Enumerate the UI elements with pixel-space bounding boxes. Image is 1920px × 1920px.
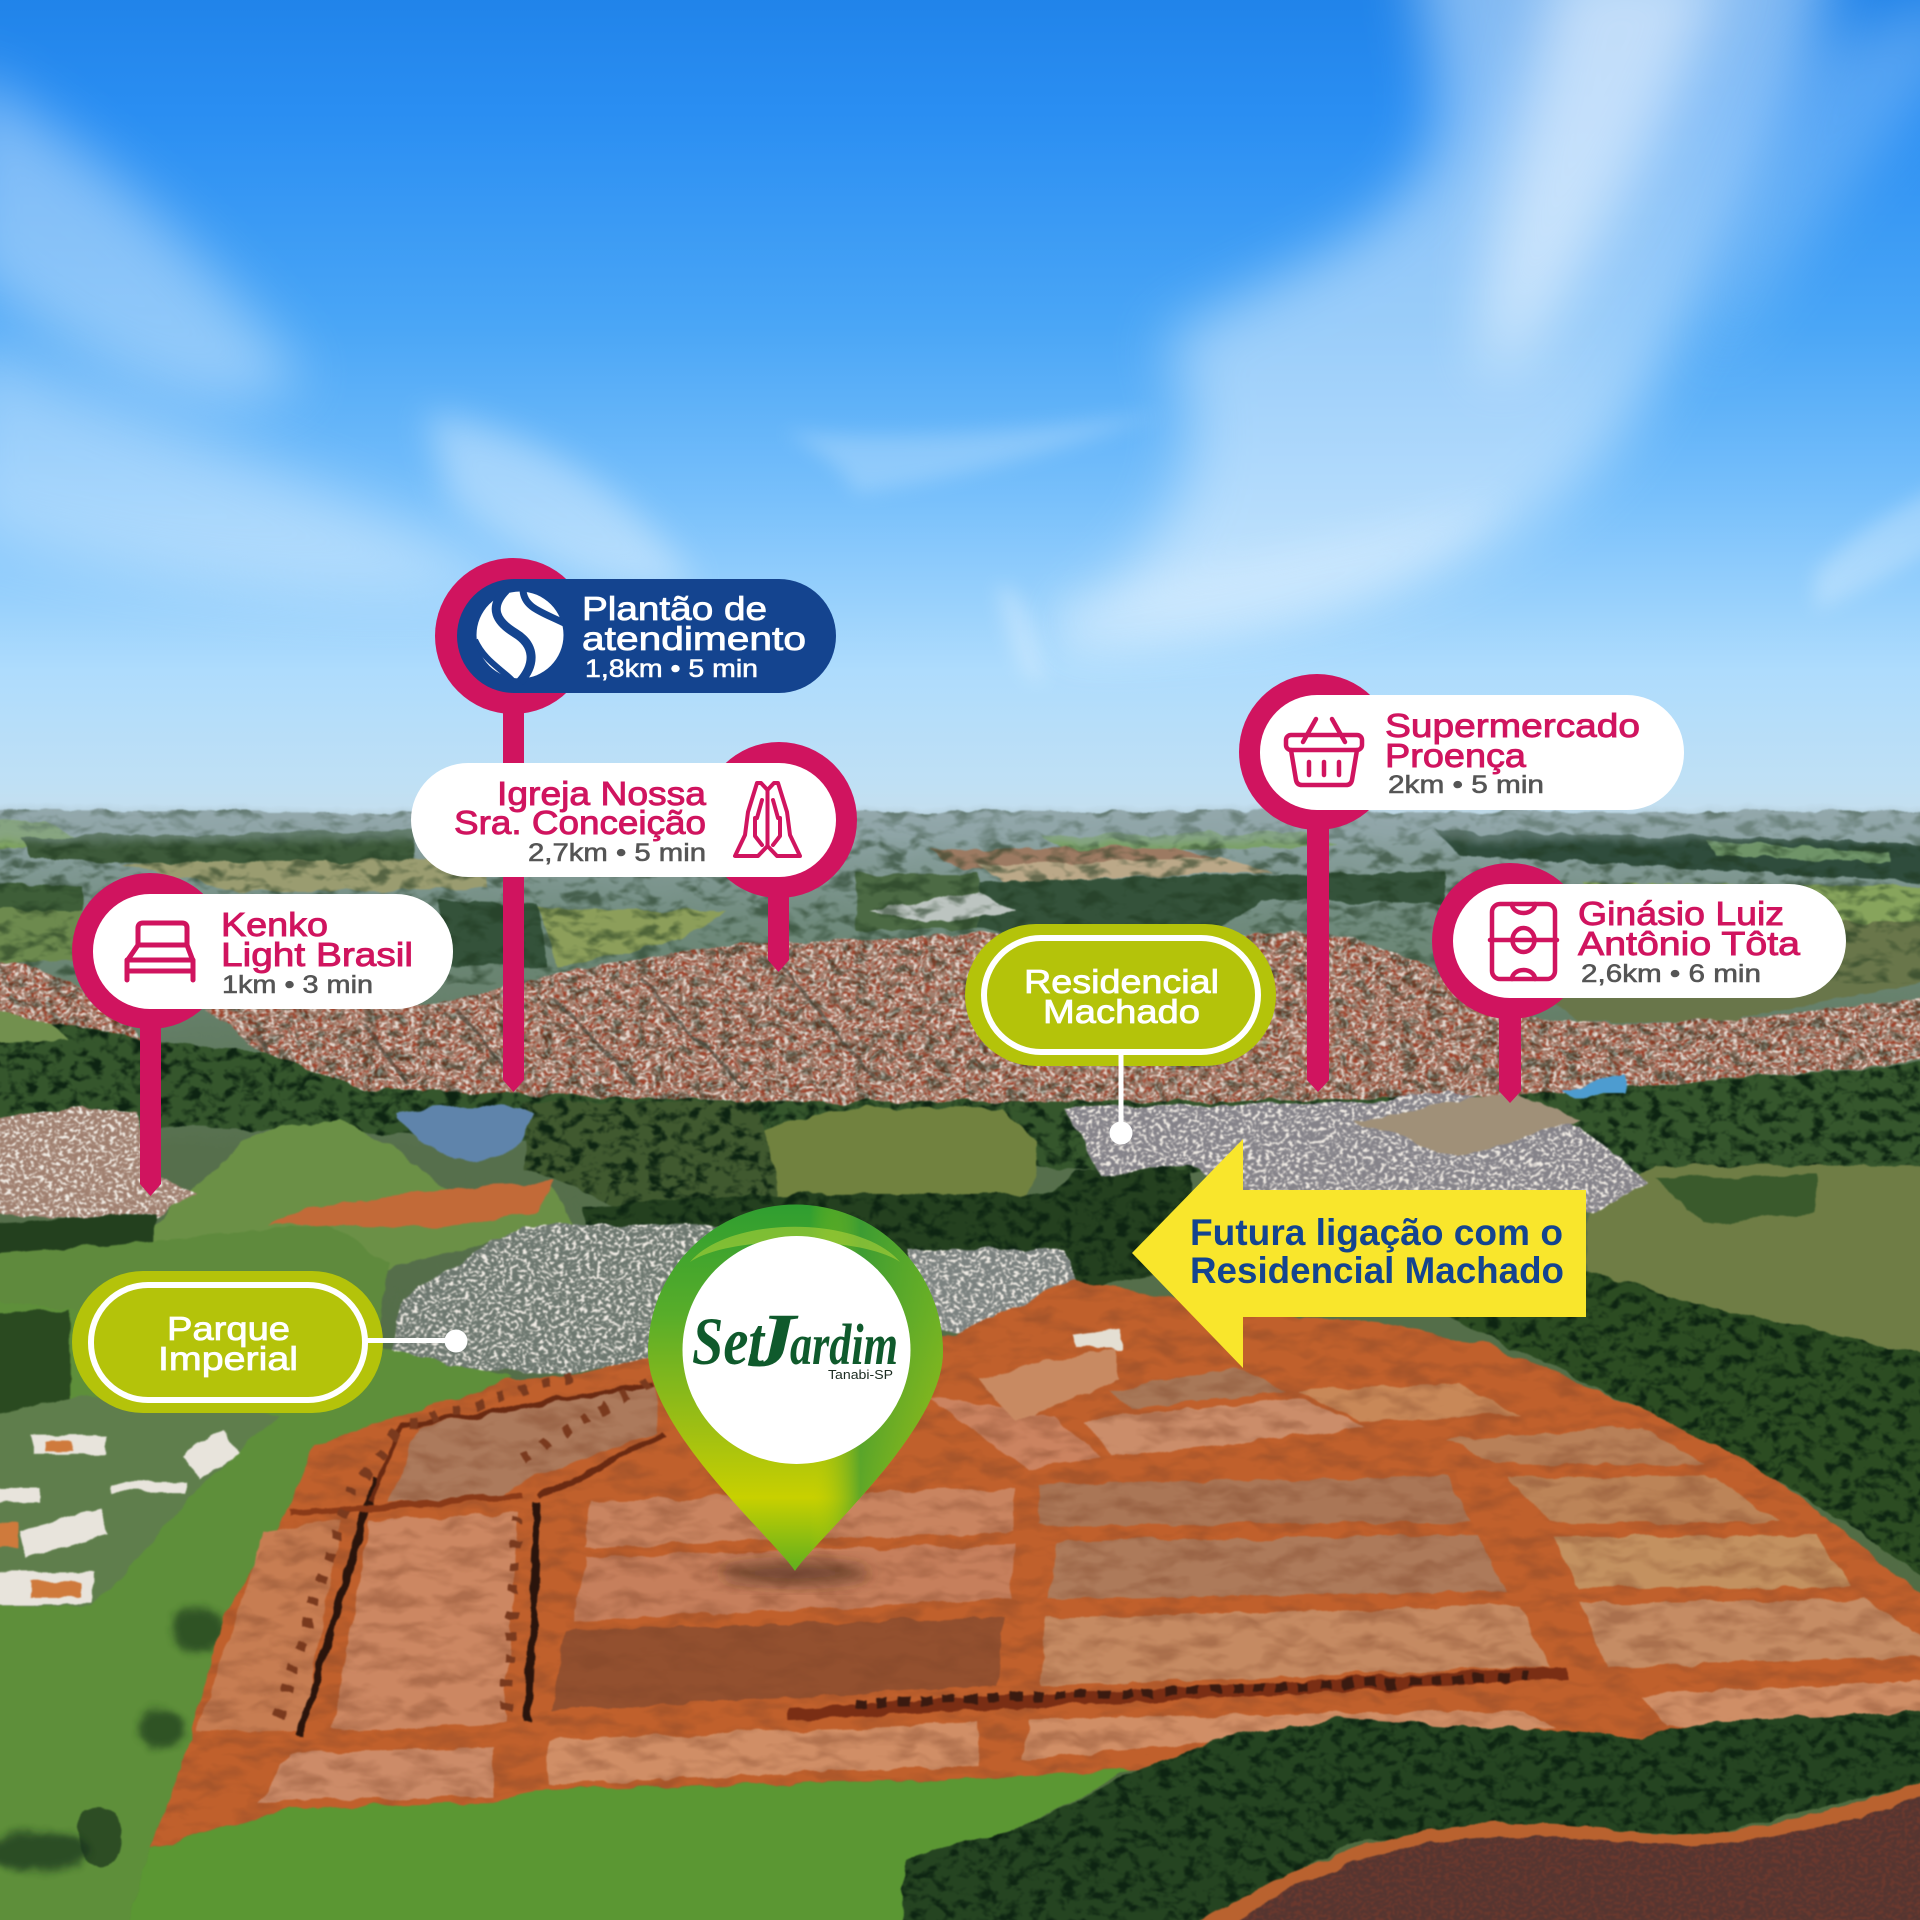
pin head and stem [72,873,228,1196]
pin: Ginásio Luiz Antônio Tôta [1432,863,1846,1103]
pin: Igreja Nossa Sra. Conceição [411,742,857,972]
label text: Ginásio Luiz [1578,895,1784,932]
label text: 2km • 5 min [1388,771,1544,799]
logo text: ardim [790,1312,898,1377]
connector and dot [367,1330,468,1352]
right forest [1384,1274,1920,1593]
construction site: red earth plots [149,1280,1920,1849]
yellow arrow shape [1132,1139,1586,1368]
white pill [1453,884,1846,998]
navy pill [457,579,836,693]
label text: Supermercado [1385,707,1640,744]
label text [158,1310,298,1377]
arrow text [1190,1212,1564,1291]
label text: Proença [1385,737,1527,774]
callout: Parque Imperial [72,1271,468,1413]
label text: 1km • 3 min [222,971,373,999]
label text: Light Brasil [221,936,413,973]
white disc [682,1236,910,1464]
icon: sports court [1490,904,1557,979]
pin head and stem [701,742,857,972]
label text: Parque [167,1310,290,1347]
pin head and stem [435,558,591,1092]
label text: Residencial [1024,963,1219,1000]
label text: Antônio Tôta [1578,925,1801,962]
pin head and stem [1239,674,1395,1092]
callout: Residencial Machado [965,924,1276,1144]
pin shadow [720,1562,870,1584]
town [0,932,1920,1102]
icon: bed [127,923,193,980]
main location pin: Set Jardim [648,1204,943,1584]
label text: Igreja Nossa [497,775,707,812]
green pill [72,1271,383,1413]
label text [454,775,707,867]
lower-left grass and houses [0,1298,1139,1920]
label text [1385,707,1640,799]
arrow text: Futura ligação com o [1190,1212,1563,1253]
label text: Imperial [158,1340,298,1377]
arrow text: Residencial Machado [1190,1250,1564,1291]
label text [1578,895,1801,988]
sky [0,0,1920,843]
midground fields, lake and hill [0,1102,1920,1360]
ploughed field [1175,1772,1920,1920]
foreground forest [905,1710,1920,1920]
white pill [411,763,836,877]
logo text: Set [692,1303,766,1379]
pin: Plantão de atendimento [435,558,836,1092]
pin: Supermercado Proença [1239,674,1684,1092]
label text [221,906,413,999]
label text: Kenko [221,906,328,943]
label text: 2,7km • 5 min [528,839,706,867]
label text: atendimento [582,620,806,657]
label text [1024,963,1219,1030]
label text [582,590,806,683]
icon: praying hands [735,783,800,856]
icon: company S logo [475,590,566,682]
green pill [965,924,1276,1066]
label text: 1,8km • 5 min [585,655,758,683]
connector and dot [1110,1052,1132,1144]
left and right residential blocks [0,1075,1649,1372]
logo text: J [747,1299,799,1383]
label text: 2,6km • 6 min [1581,960,1761,988]
white pill [93,894,453,1009]
logo text [692,1299,898,1383]
pin head and stem [1432,863,1588,1103]
white ring [91,1285,365,1400]
icon: shopping basket [1286,719,1362,785]
pin body [648,1204,943,1571]
label text: Sra. Conceição [454,804,706,841]
label text: Machado [1043,993,1200,1030]
arrow: future connection [1132,1139,1586,1368]
white pill [1260,695,1684,810]
tree band [0,1009,1920,1188]
white ring [984,938,1258,1052]
logo text: Tanabi-SP [828,1368,893,1382]
pin: Kenko Light Brasil [72,873,453,1196]
distant farmland [0,811,1920,1920]
label text: Plantão de [582,590,767,627]
